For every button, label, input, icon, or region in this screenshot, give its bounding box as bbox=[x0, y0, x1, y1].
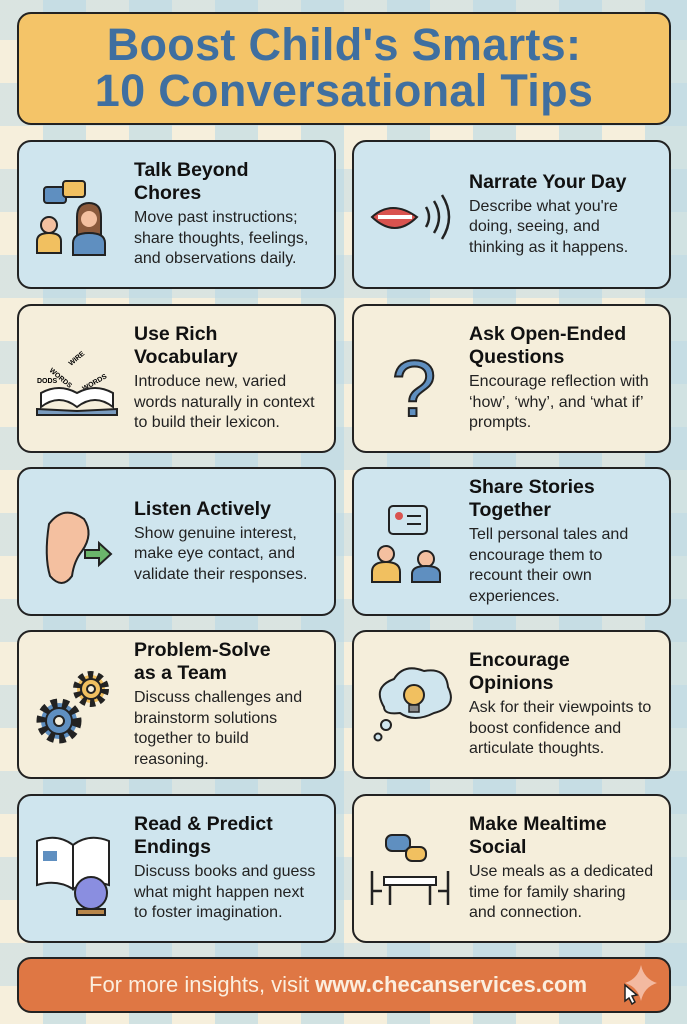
text bbox=[134, 323, 315, 431]
text bbox=[134, 639, 302, 768]
icon: thought bubble with bulb bbox=[374, 667, 452, 742]
text: prompts. bbox=[469, 414, 531, 431]
text: Talk Beyond bbox=[134, 159, 248, 181]
text: words naturally in context bbox=[134, 394, 315, 411]
icon: gears bbox=[36, 671, 109, 744]
panel: narrate your day bbox=[352, 140, 671, 289]
text bbox=[134, 813, 315, 921]
title bbox=[17, 12, 671, 125]
icon: book and crystal ball bbox=[36, 836, 110, 916]
text: Vocabulary bbox=[134, 346, 238, 368]
icon: question mark: ? bbox=[392, 344, 436, 431]
icon: two people with story bubble bbox=[371, 505, 441, 583]
panel: make mealtime social bbox=[352, 794, 671, 943]
icon: open book with words: WORDS bbox=[48, 367, 73, 390]
text: Social bbox=[469, 836, 526, 858]
panel: ask open-ended questions bbox=[352, 304, 671, 453]
text: make eye contact, and bbox=[134, 545, 295, 562]
text: Encourage bbox=[469, 649, 570, 671]
text: together to build bbox=[134, 730, 249, 747]
text: as a Team bbox=[134, 662, 227, 684]
text: articulate thoughts. bbox=[469, 740, 604, 757]
panel: use rich vocabulary bbox=[17, 304, 336, 453]
text bbox=[134, 159, 308, 267]
text: Discuss challenges and bbox=[134, 689, 302, 706]
text: Make Mealtime bbox=[469, 813, 607, 835]
text: thinking as it happens. bbox=[469, 239, 628, 256]
text: to foster imagination. bbox=[134, 904, 283, 921]
title: Boost Child's Smarts: bbox=[107, 19, 581, 70]
text: validate their responses. bbox=[134, 566, 307, 583]
icon: cursor sparkle bbox=[624, 965, 657, 1006]
text: Discuss books and guess bbox=[134, 863, 315, 880]
icon: open book with words: WIRE bbox=[68, 350, 87, 368]
panel: share stories together bbox=[352, 467, 671, 616]
text: Describe what you're bbox=[469, 198, 618, 215]
panel: encourage opinions bbox=[352, 630, 671, 779]
panel: problem-solve as a team bbox=[17, 630, 336, 779]
text bbox=[469, 649, 651, 757]
text: brainstorm solutions bbox=[134, 710, 277, 726]
panel: listen actively bbox=[17, 467, 336, 616]
title: 10 Conversational Tips bbox=[95, 65, 593, 116]
panel: read & predict endings bbox=[17, 794, 336, 943]
text: doing, seeing, and bbox=[469, 218, 600, 235]
text: Questions bbox=[469, 346, 564, 368]
text: Tell personal tales and bbox=[469, 526, 628, 543]
text: Narrate Your Day bbox=[469, 171, 627, 193]
text: boost confidence and bbox=[469, 720, 621, 737]
text bbox=[469, 476, 628, 604]
icon: open book with words bbox=[36, 350, 118, 416]
text: what might happen next bbox=[134, 884, 304, 901]
icon: ear with arrow bbox=[46, 512, 112, 584]
icon: dining table with speech bubbles bbox=[370, 834, 450, 905]
text: encourage them to bbox=[469, 546, 602, 564]
text: Problem-Solve bbox=[134, 639, 271, 661]
panel: talk beyond chores bbox=[17, 140, 336, 289]
text: Use meals as a dedicated bbox=[469, 863, 653, 880]
text: Move past instructions; bbox=[134, 209, 298, 226]
text: recount their own bbox=[469, 567, 592, 584]
icon: open book with words: WORDS bbox=[82, 373, 109, 393]
text: Encourage reflection with bbox=[469, 373, 649, 390]
text: Read & Predict bbox=[134, 813, 273, 835]
text: Introduce new, varied bbox=[134, 373, 286, 390]
icon: parent and child talking bbox=[36, 180, 106, 256]
text: Use Rich bbox=[134, 323, 217, 345]
text: Opinions bbox=[469, 672, 554, 694]
text bbox=[469, 323, 649, 431]
text: Ask for their viewpoints to bbox=[469, 699, 651, 716]
text bbox=[469, 171, 628, 256]
text: Ask Open-Ended bbox=[469, 323, 626, 345]
text bbox=[469, 813, 653, 921]
text bbox=[134, 498, 307, 583]
text: and observations daily. bbox=[134, 250, 296, 267]
text: Share Stories bbox=[469, 476, 595, 498]
text: share thoughts, feelings, bbox=[134, 230, 308, 247]
text: ‘how’, ‘why’, and ‘what if’ bbox=[469, 394, 644, 411]
text: Show genuine interest, bbox=[134, 525, 297, 542]
text: Endings bbox=[134, 836, 211, 858]
text: and connection. bbox=[469, 904, 582, 921]
text: reasoning. bbox=[134, 750, 209, 768]
text: Together bbox=[469, 499, 551, 521]
text: Listen Actively bbox=[134, 498, 271, 520]
text: to build their lexicon. bbox=[134, 414, 280, 431]
footer: For more insights, visit www.checanservices.com bbox=[89, 972, 587, 997]
text: Chores bbox=[134, 182, 201, 204]
icon: open book with words: DODS bbox=[37, 378, 58, 385]
footer bbox=[17, 957, 671, 1013]
text: time for family sharing bbox=[469, 884, 626, 901]
text: experiences. bbox=[469, 588, 560, 604]
icon: mouth speaking bbox=[370, 194, 450, 240]
